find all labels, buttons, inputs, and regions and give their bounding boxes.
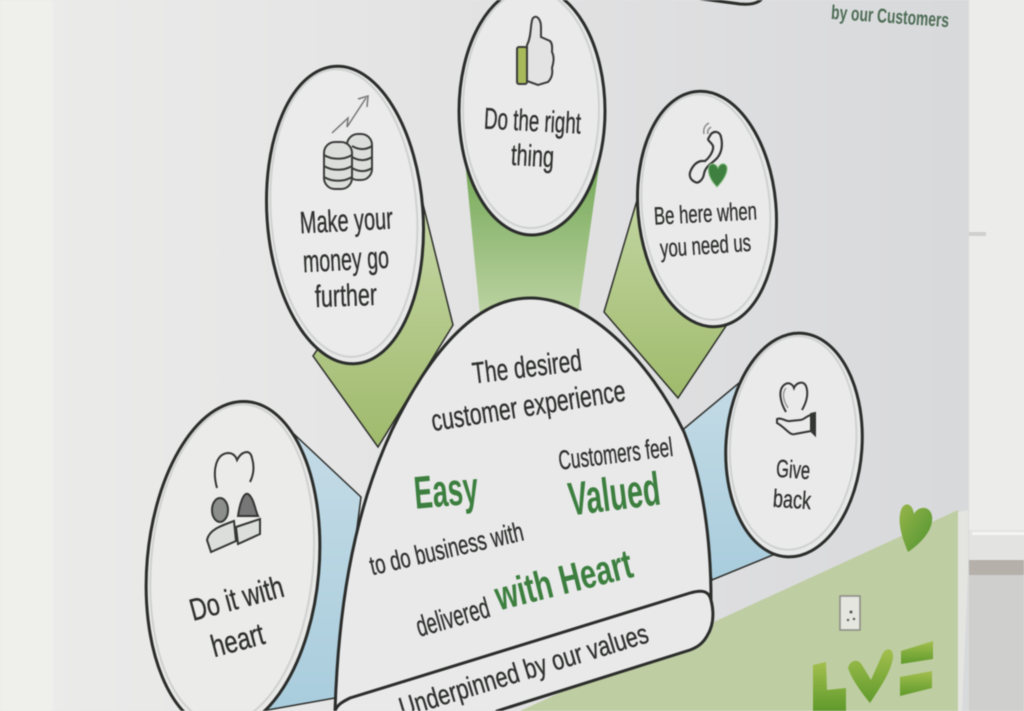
logo: LV= bbox=[813, 641, 933, 711]
delivered with heart: delivered bbox=[413, 592, 493, 644]
easy block bbox=[367, 461, 526, 581]
label: heart bbox=[207, 616, 268, 664]
heading: customer experience bbox=[429, 375, 628, 438]
label bbox=[483, 103, 582, 174]
label: Give bbox=[775, 455, 811, 485]
valued block bbox=[557, 432, 674, 525]
label: back bbox=[772, 485, 812, 515]
circle: do the right thing bbox=[459, 0, 605, 235]
label bbox=[299, 201, 394, 314]
caption: by our customers: by our Customers bbox=[830, 2, 950, 32]
circle: be here when you need us bbox=[628, 85, 786, 333]
label: Do the right bbox=[483, 103, 582, 141]
left column bbox=[0, 0, 53, 711]
green floor band bbox=[520, 510, 958, 711]
circle: do it with heart bbox=[133, 394, 333, 711]
label: Make your bbox=[299, 201, 394, 240]
heading: The desired bbox=[470, 344, 584, 391]
connector: give back bbox=[680, 378, 780, 580]
label: money go bbox=[302, 240, 390, 279]
heading bbox=[429, 344, 628, 438]
label: you need us bbox=[659, 229, 752, 263]
dome: the desired customer experience bbox=[335, 298, 711, 711]
connector: do the right thing bbox=[464, 150, 600, 315]
icon: two people and heart bbox=[207, 452, 260, 552]
icon: coins and rising arrow bbox=[324, 96, 372, 189]
label: further bbox=[314, 277, 378, 314]
label bbox=[653, 197, 758, 263]
icon: green heart bbox=[900, 504, 932, 552]
circle: make your money go further bbox=[257, 61, 433, 369]
connector: be here when you need us bbox=[604, 190, 730, 398]
connector: do it with heart bbox=[262, 435, 361, 711]
circle: give back bbox=[718, 329, 870, 561]
icon: wall socket bbox=[840, 596, 860, 630]
valued block: Valued bbox=[565, 462, 663, 525]
label bbox=[186, 569, 288, 664]
connector: make your money go further bbox=[313, 196, 453, 447]
label: Be here when bbox=[653, 197, 758, 231]
wall end strip bbox=[958, 510, 968, 711]
label bbox=[772, 455, 812, 515]
delivered with heart: with Heart bbox=[489, 541, 637, 619]
icon: heart in hand bbox=[777, 383, 815, 435]
label: thing bbox=[510, 139, 555, 174]
icon: thumbs up bbox=[517, 17, 554, 85]
easy block: Easy bbox=[412, 461, 480, 519]
label: Do it with bbox=[186, 569, 288, 628]
easy block: to do business with bbox=[367, 517, 526, 581]
valued block: Customers feel bbox=[557, 432, 674, 476]
icon: phone and heart bbox=[690, 123, 727, 187]
delivered with heart bbox=[413, 541, 637, 644]
top box fragment bbox=[680, 0, 764, 4]
